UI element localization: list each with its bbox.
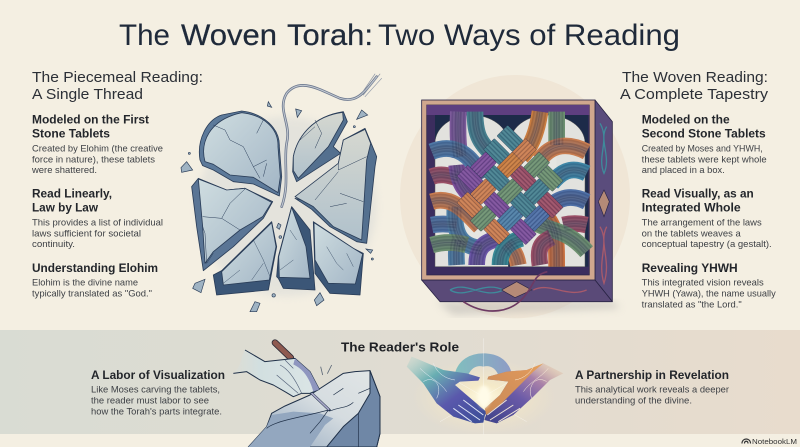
text block: read linearly: continuity. xyxy=(32,239,75,249)
piece: middle left xyxy=(192,178,273,271)
hanging thread xyxy=(463,272,547,311)
text block: read visually: Integrated Whole xyxy=(642,200,741,214)
text block: second stone tablets: Modeled on the xyxy=(642,112,730,126)
heading: piecemeal reading: The Piecemeal Reading: xyxy=(32,69,203,86)
heading: woven reading: A Complete Tapestry xyxy=(620,86,769,103)
text block: first stone tablets: Stone Tablets xyxy=(32,126,110,140)
text block: labor of visualization: Like Moses carving the tablets, xyxy=(91,385,220,395)
text block: partnership in revelation xyxy=(575,368,729,406)
heading: piecemeal reading xyxy=(32,69,203,103)
piece: bottom right xyxy=(313,222,363,295)
text block: read linearly xyxy=(32,186,163,249)
text block: labor of visualization: how the Torah's parts integrate. xyxy=(91,406,222,416)
heading: woven reading xyxy=(620,69,769,103)
text block: second stone tablets: and placed in a box. xyxy=(642,165,725,175)
illustration: shattered stone tablets with thread xyxy=(181,74,382,312)
woven lattice xyxy=(457,125,563,245)
text block: read linearly: This provides a list of individual xyxy=(32,218,163,228)
right hand xyxy=(484,363,563,423)
text block: labor of visualization: the reader must labor to see xyxy=(91,396,209,406)
text block: read visually: conceptual tapestry (a gestalt). xyxy=(642,239,772,249)
text block: revealing YHWH: This integrated vision reveals xyxy=(642,278,764,288)
piece: top left xyxy=(199,111,282,196)
text block: revealing YHWH: translated as "the Lord." xyxy=(642,300,742,310)
illustration: partnership hands with light xyxy=(407,338,563,435)
text block: read linearly: laws sufficient for societal xyxy=(32,228,141,238)
text block: understanding Elohim: Understanding Elohim xyxy=(32,261,158,275)
text block: read linearly: Read Linearly, xyxy=(32,186,112,200)
title: Two Ways of Reading xyxy=(378,19,680,52)
glow xyxy=(412,358,556,435)
illustration: woven tapestry in a box xyxy=(400,75,630,318)
text block: second stone tablets: these tablets were kept whole xyxy=(642,154,767,164)
title: Torah: xyxy=(287,19,373,52)
text block: first stone tablets: Created by Elohim (the creative xyxy=(32,144,163,154)
text block: read linearly: Law by Law xyxy=(32,200,98,214)
rock xyxy=(248,371,380,447)
text block: understanding Elohim: Elohim is the divine name xyxy=(32,278,138,288)
curved strands xyxy=(432,112,587,267)
heading: piecemeal reading: A Single Thread xyxy=(32,86,143,103)
text block: second stone tablets: Created by Moses and YHWH, xyxy=(642,144,763,154)
shards xyxy=(181,102,373,312)
panel: piecemeal reading text xyxy=(31,69,203,299)
piece: bottom left xyxy=(213,222,277,295)
logo: NotebookLM: NotebookLM xyxy=(752,437,797,446)
text block: understanding Elohim xyxy=(32,261,158,299)
text block: labor of visualization: A Labor of Visualization xyxy=(91,368,225,382)
text block: read visually xyxy=(642,186,772,249)
text block: revealing YHWH: Revealing YHWH xyxy=(642,261,738,275)
glow circle xyxy=(400,75,630,318)
text block: understanding Elohim: typically translated as "God." xyxy=(32,289,152,299)
text block: read visually: Read Visually, as an xyxy=(642,186,754,200)
piece: right large xyxy=(295,128,377,243)
panel: woven reading text xyxy=(620,69,776,310)
illustration: hand carving stone xyxy=(233,343,380,447)
thread xyxy=(282,74,382,207)
title: Woven xyxy=(181,19,277,52)
text block: read visually: on the tablets weaves a xyxy=(642,228,742,238)
icon: notebook mark xyxy=(742,439,750,444)
text block: revealing YHWH xyxy=(642,261,776,310)
hand xyxy=(233,350,319,397)
box sides xyxy=(422,100,612,302)
left hand xyxy=(407,357,487,423)
text block: partnership in revelation: understanding of the divine. xyxy=(575,396,692,406)
text block: second stone tablets xyxy=(642,112,767,175)
text block: second stone tablets: Second Stone Tablets xyxy=(642,126,766,140)
text block: labor of visualization xyxy=(91,368,225,416)
panel: the reader's role band xyxy=(0,330,800,434)
text block: partnership in revelation: This analytical work reveals a deeper xyxy=(575,385,729,395)
piece: bottom centre xyxy=(277,207,315,290)
piece: top right xyxy=(293,112,347,182)
text block: first stone tablets: Modeled on the First xyxy=(32,112,149,126)
stone tablets inside box xyxy=(435,115,585,267)
box frame xyxy=(422,100,595,280)
text block: first stone tablets xyxy=(31,112,163,175)
text block: read visually: The arrangement of the laws xyxy=(642,218,762,228)
text block: partnership in revelation: A Partnership in Revelation xyxy=(575,368,729,382)
halo arch xyxy=(455,353,512,375)
chisel xyxy=(275,343,329,410)
text block: first stone tablets: force in nature), these tablets xyxy=(32,154,155,164)
title xyxy=(119,19,680,52)
heading: woven reading: The Woven Reading: xyxy=(622,69,768,86)
heading: the reader's role: The Reader's Role xyxy=(341,340,459,354)
title: The xyxy=(119,19,170,52)
text block: revealing YHWH: YHWH (Yawa), the name usually xyxy=(642,289,776,299)
central light xyxy=(478,385,490,408)
box decoration xyxy=(450,123,607,293)
text block: first stone tablets: were shattered. xyxy=(31,165,97,175)
